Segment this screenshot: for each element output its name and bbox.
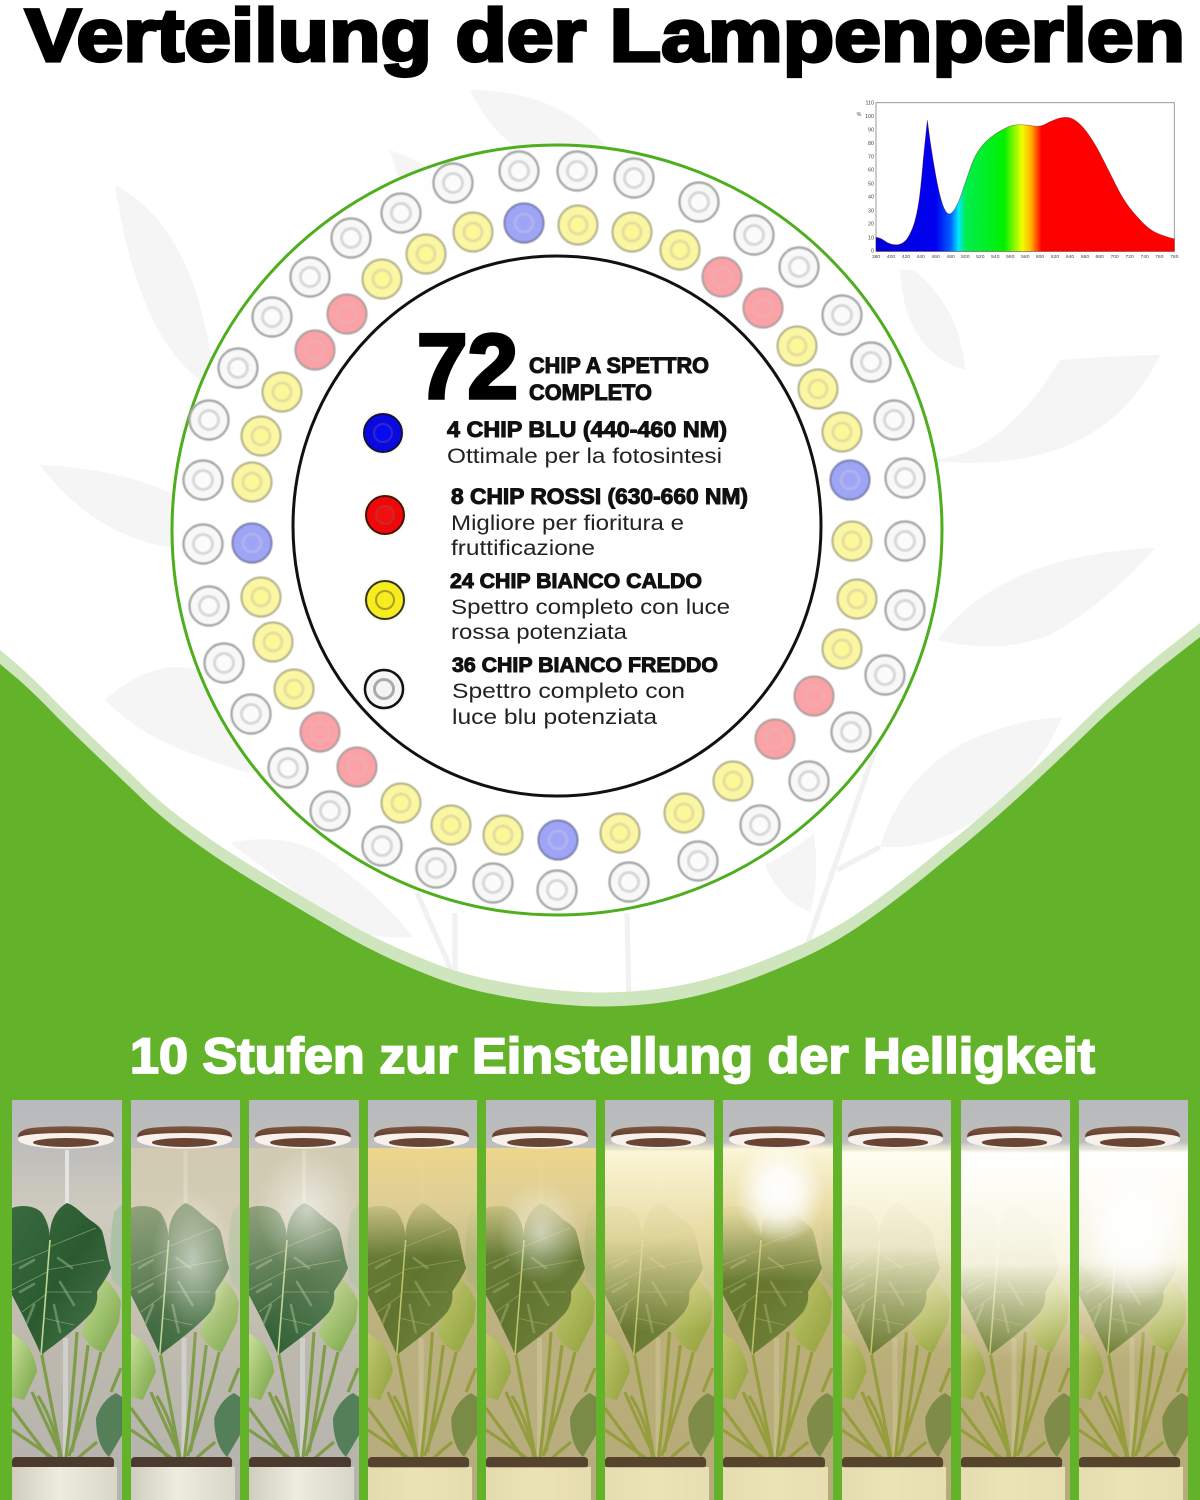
spectrum chart: 540 bbox=[991, 254, 1000, 260]
spectrum chart: 40 bbox=[868, 195, 874, 201]
chips: 36 cold white bbox=[184, 152, 924, 910]
photo strip: brightness level 7 bbox=[723, 1100, 833, 1500]
legend: white chip bbox=[362, 654, 718, 729]
chips: 8 red bbox=[296, 258, 834, 786]
background: faint leaves bbox=[40, 90, 1160, 1003]
spectrum chart: 520 bbox=[976, 254, 985, 260]
ring diagram bbox=[172, 145, 942, 915]
spectrum chart: 90 bbox=[868, 127, 874, 133]
legend: red chip: fruttificazione bbox=[451, 537, 595, 560]
photo strip: brightness level 1 bbox=[12, 1100, 122, 1500]
chips: 24 warm white bbox=[232, 206, 876, 854]
photo strip: brightness level 2 bbox=[131, 1100, 240, 1500]
photo strip: brightness level 5 bbox=[486, 1100, 596, 1500]
legend: yellow chip: Spettro completo con luce bbox=[451, 596, 730, 619]
spectrum chart: % bbox=[857, 112, 862, 118]
chips: 4 blue bbox=[232, 204, 870, 860]
spectrum chart bbox=[850, 90, 1190, 270]
spectrum chart: 0 bbox=[871, 249, 874, 255]
background: green wave bbox=[0, 623, 1200, 1500]
spectrum chart: 500 bbox=[961, 254, 970, 260]
spectrum chart: 30 bbox=[868, 208, 874, 214]
spectrum chart: 20 bbox=[868, 222, 874, 228]
heading: 72 chips: COMPLETO bbox=[529, 380, 652, 405]
spectrum chart: 70 bbox=[868, 154, 874, 160]
spectrum chart: 760 bbox=[1155, 254, 1164, 260]
legend: blue chip bbox=[361, 411, 727, 468]
spectrum chart: 780 bbox=[1170, 254, 1179, 260]
legend: white chip: 36 CHIP BIANCO FREDDO bbox=[452, 654, 718, 677]
spectrum chart: 10 bbox=[868, 235, 874, 241]
spectrum chart: 80 bbox=[868, 141, 874, 147]
photo strip: brightness level 8 bbox=[842, 1100, 951, 1500]
heading: 72 chips bbox=[417, 316, 709, 418]
photo strip: brightness level 9 bbox=[961, 1100, 1070, 1500]
legend: white chip: Spettro completo con bbox=[452, 680, 685, 703]
spectrum chart: 700 bbox=[1110, 254, 1119, 260]
spectrum chart: 640 bbox=[1066, 254, 1074, 260]
legend: yellow chip: rossa potenziata bbox=[451, 621, 627, 644]
legend: blue chip: 4 CHIP BLU (440-460 NM) bbox=[447, 417, 727, 442]
outer green ring bbox=[172, 145, 942, 915]
legend: red chip bbox=[363, 484, 748, 560]
spectrum chart: 460 bbox=[932, 254, 940, 260]
photo strip: brightness level 6 bbox=[605, 1100, 714, 1500]
photo strip: brightness level 10 bbox=[1079, 1100, 1188, 1500]
spectrum chart: 600 bbox=[1036, 254, 1044, 260]
legend: white chip: luce blu potenziata bbox=[452, 706, 657, 729]
spectrum chart: 480 bbox=[947, 254, 955, 260]
photo strip: brightness level 3 bbox=[249, 1100, 359, 1500]
spectrum chart: 620 bbox=[1051, 254, 1059, 260]
heading: 72 chips: 72 bbox=[417, 316, 518, 418]
spectrum chart: 580 bbox=[1021, 254, 1030, 260]
spectrum chart: 50 bbox=[868, 181, 874, 187]
spectrum chart: 680 bbox=[1096, 254, 1104, 260]
spectrum chart: 560 bbox=[1006, 254, 1015, 260]
spectrum chart: 380 bbox=[872, 254, 880, 260]
legend: blue chip: Ottimale per la fotosintesi bbox=[447, 445, 722, 468]
spectrum chart: 110 bbox=[865, 101, 874, 107]
spectrum chart: 440 bbox=[917, 254, 925, 260]
photo strip: brightness level 4 bbox=[368, 1100, 477, 1500]
spectrum chart: 720 bbox=[1125, 254, 1134, 260]
spectrum chart: 420 bbox=[902, 254, 910, 260]
spectrum chart: 660 bbox=[1081, 254, 1089, 260]
heading: brightness levels: 10 Stufen zur Einstellung der Helligkeit bbox=[130, 1028, 1095, 1084]
spectrum chart: 740 bbox=[1140, 254, 1149, 260]
inner black ring bbox=[293, 256, 821, 796]
legend: red chip: Migliore per fioritura e bbox=[451, 512, 684, 535]
legend: yellow chip: 24 CHIP BIANCO CALDO bbox=[450, 570, 702, 593]
legend: yellow chip bbox=[363, 570, 730, 644]
spectrum chart: 60 bbox=[868, 168, 874, 174]
heading: 72 chips: CHIP A SPETTRO bbox=[529, 353, 709, 378]
legend: red chip: 8 CHIP ROSSI (630-660 NM) bbox=[451, 484, 748, 509]
spectrum chart: 400 bbox=[887, 254, 895, 260]
spectrum chart: 100 bbox=[865, 114, 874, 120]
